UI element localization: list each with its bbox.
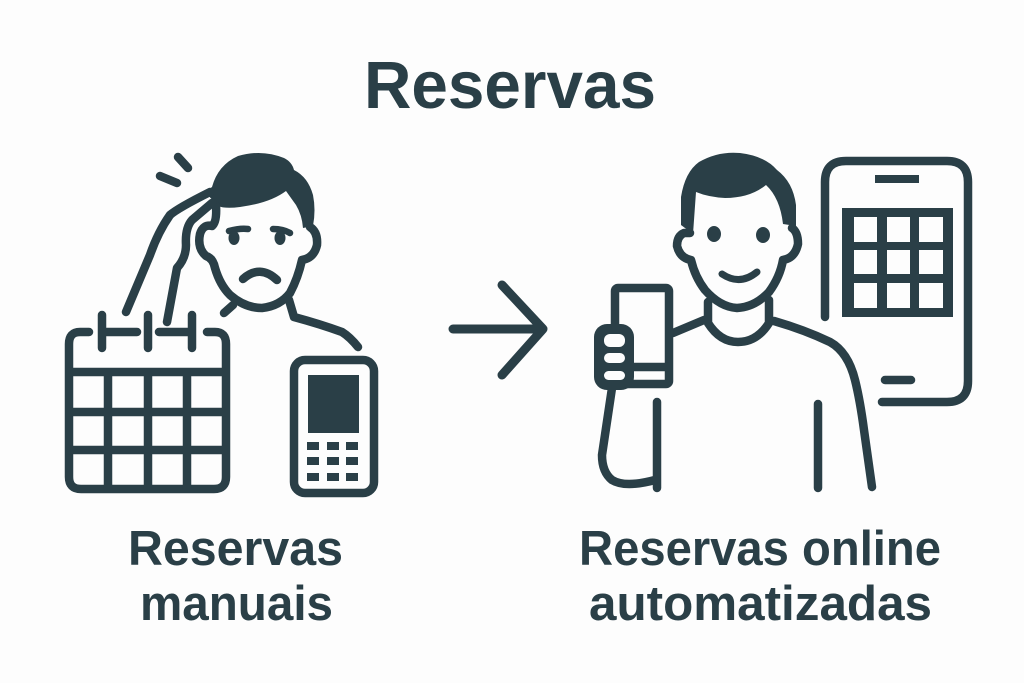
forearm bbox=[602, 388, 655, 484]
collar and neck bbox=[708, 300, 769, 342]
paper calendar bbox=[69, 315, 226, 489]
neck and shoulder bbox=[224, 300, 358, 347]
sad eyebrows and eyes bbox=[228, 229, 290, 245]
shoulders and torso bbox=[673, 320, 872, 487]
tablet calendar grid bbox=[842, 208, 953, 317]
handheld phone bbox=[615, 288, 669, 384]
panel: manual bookings bbox=[69, 153, 374, 631]
label: manual bookings: manuais bbox=[140, 577, 333, 631]
forearm inner line bbox=[167, 203, 212, 322]
sleeve lines bbox=[657, 402, 818, 488]
raised arm bbox=[126, 192, 210, 312]
phone screen bbox=[308, 375, 359, 433]
label: automated online bookings: Reservas online bbox=[579, 522, 941, 576]
panel: automated online bookings bbox=[579, 153, 968, 631]
keypad phone bbox=[294, 360, 374, 493]
tablet bottom bar bbox=[885, 376, 911, 384]
stress marks bbox=[160, 157, 188, 183]
eyes bbox=[707, 226, 770, 243]
label: automated online bookings bbox=[579, 522, 941, 631]
stressed person bbox=[126, 153, 358, 347]
hair bbox=[205, 153, 314, 228]
happy person bbox=[594, 153, 872, 488]
smile bbox=[722, 272, 757, 280]
calendar grid bbox=[69, 372, 226, 489]
label: manual bookings: Reservas bbox=[128, 522, 343, 576]
tablet with calendar bbox=[825, 161, 968, 402]
phone keypad bbox=[307, 442, 358, 481]
hand with fingers bbox=[594, 324, 634, 390]
calendar rings bbox=[102, 315, 192, 348]
arrow bbox=[453, 285, 543, 375]
head outline bbox=[199, 206, 317, 308]
hair bbox=[681, 153, 796, 234]
head outline bbox=[677, 228, 798, 308]
sad mouth bbox=[243, 272, 277, 280]
tablet top bar bbox=[875, 175, 919, 183]
label: manual bookings bbox=[128, 522, 343, 631]
title: Reservas bbox=[364, 48, 656, 123]
label: automated online bookings: automatizadas bbox=[589, 577, 932, 631]
